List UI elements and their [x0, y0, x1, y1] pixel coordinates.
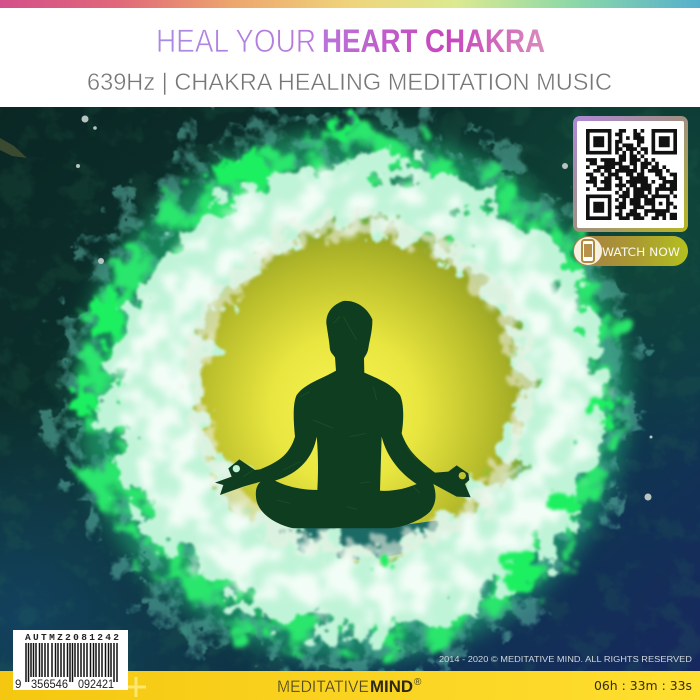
title: HEART CHAKRA [322, 23, 545, 59]
bright green flame [84, 137, 620, 653]
barcode label [13, 630, 128, 690]
footer bar [0, 671, 700, 700]
figure mottling [243, 317, 420, 509]
subtitle: 639Hz | CHAKRA HEALING MEDITATION MUSIC [87, 69, 612, 96]
icon: phone [574, 237, 602, 265]
plus mark [127, 677, 146, 697]
copyright: 2014 - 2020 © MEDITATIVE MIND. ALL RIGHTS RESERVED [439, 654, 692, 664]
white core [123, 177, 593, 617]
QR code [586, 131, 677, 218]
digits [15, 679, 114, 691]
digits: 092421 [78, 679, 114, 691]
brand logo [277, 677, 422, 696]
glowing sun disc [191, 212, 542, 567]
brand logo: MIND [370, 678, 413, 696]
saturated green patches [74, 115, 618, 588]
figure [215, 301, 471, 528]
code: AUTMZ2081242 [25, 632, 119, 643]
header [87, 23, 612, 96]
title [156, 23, 545, 59]
brand logo: MEDITATIVE [277, 678, 369, 696]
digits: 356546 [31, 679, 68, 691]
brand logo: ® [414, 677, 422, 688]
button label: WATCH NOW [602, 245, 680, 259]
title: HEAL YOUR [156, 23, 316, 59]
soft green glow [76, 129, 628, 661]
cushion [278, 520, 439, 560]
pill [573, 236, 688, 266]
barcode [13, 630, 128, 691]
card border [573, 116, 688, 232]
QR card [573, 116, 688, 232]
floating dust particles [76, 116, 652, 500]
flame ring [57, 107, 633, 677]
grey smoke at inner edge [186, 216, 534, 560]
leaf shape [0, 138, 27, 158]
meditating silhouette [215, 301, 471, 528]
digits: 9 [15, 679, 21, 691]
duration: 06h : 33m : 33s [594, 679, 692, 693]
card face [577, 121, 684, 228]
rainbow top bar [0, 0, 700, 8]
bars [26, 643, 117, 682]
outer teal wisps [57, 107, 633, 677]
pale mint smoke band [110, 165, 606, 629]
watch now button [573, 236, 688, 266]
